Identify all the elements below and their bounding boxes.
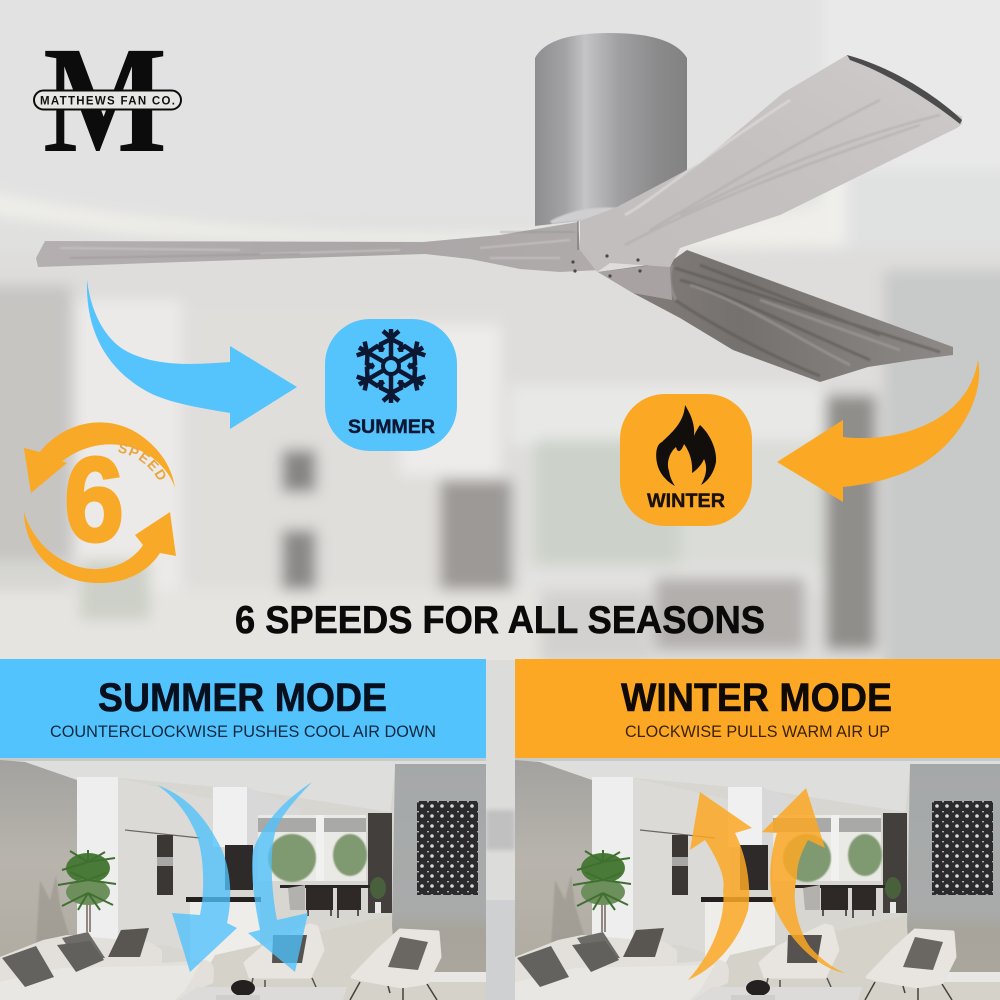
icon: snowflake xyxy=(354,329,428,403)
fan blade: upper right xyxy=(578,55,962,272)
icon: summer badge xyxy=(325,319,457,451)
icon: 6 speed badge: 6 xyxy=(64,433,124,567)
arrow: orange curve to winter icon xyxy=(777,360,979,502)
armchair right xyxy=(350,930,440,1000)
icon: 6 speed badge xyxy=(24,422,176,583)
panel: winter mode header: WINTER MODE xyxy=(621,676,892,720)
arrow: air flow down, right xyxy=(248,782,312,972)
ceiling fan xyxy=(36,33,962,382)
panel: summer mode header: SUMMER MODE xyxy=(98,676,387,720)
panel: summer mode header: COUNTERCLOCKWISE PUSHES COOL AIR DOWN xyxy=(50,722,436,741)
armchair left xyxy=(245,925,323,987)
curved SPEED label xyxy=(117,452,163,490)
icon: winter badge xyxy=(620,394,752,526)
icon: summer badge: SUMMER xyxy=(348,417,435,438)
arrow: air flow up, left xyxy=(688,792,752,980)
photo: living room, summer xyxy=(0,758,486,1000)
logo: Matthews Fan Co.: M xyxy=(43,16,167,185)
logo: Matthews Fan Co.: MATTHEWS FAN CO. xyxy=(40,96,175,108)
plant xyxy=(36,850,116,945)
icon: winter badge: WINTER xyxy=(647,490,725,512)
panel: summer mode header xyxy=(0,659,486,758)
fan blade: left xyxy=(36,222,600,272)
icon: 6 speed badge: SPEED xyxy=(118,444,166,480)
fan motor housing xyxy=(535,33,687,226)
arrow: air flow up, right xyxy=(762,788,845,973)
sofa xyxy=(0,928,214,1000)
arrow: blue curve to summer icon xyxy=(87,280,297,429)
divider strip between the room panels xyxy=(486,660,515,1000)
top rotation arrow xyxy=(24,422,175,493)
panel: winter mode header xyxy=(515,659,1000,758)
blade screws xyxy=(571,254,642,278)
icon: flame xyxy=(656,405,716,486)
title: 6 SPEEDS FOR ALL SEASONS xyxy=(235,599,765,642)
coffee table with teapot xyxy=(178,980,347,1000)
photo: living room, winter xyxy=(515,758,1000,1000)
fan blade: lower right (dark) xyxy=(598,250,953,382)
panel: winter mode header: CLOCKWISE PULLS WARM AIR UP xyxy=(625,722,890,741)
arrow: air flow down, left xyxy=(157,785,237,972)
bottom rotation arrow xyxy=(24,512,176,583)
